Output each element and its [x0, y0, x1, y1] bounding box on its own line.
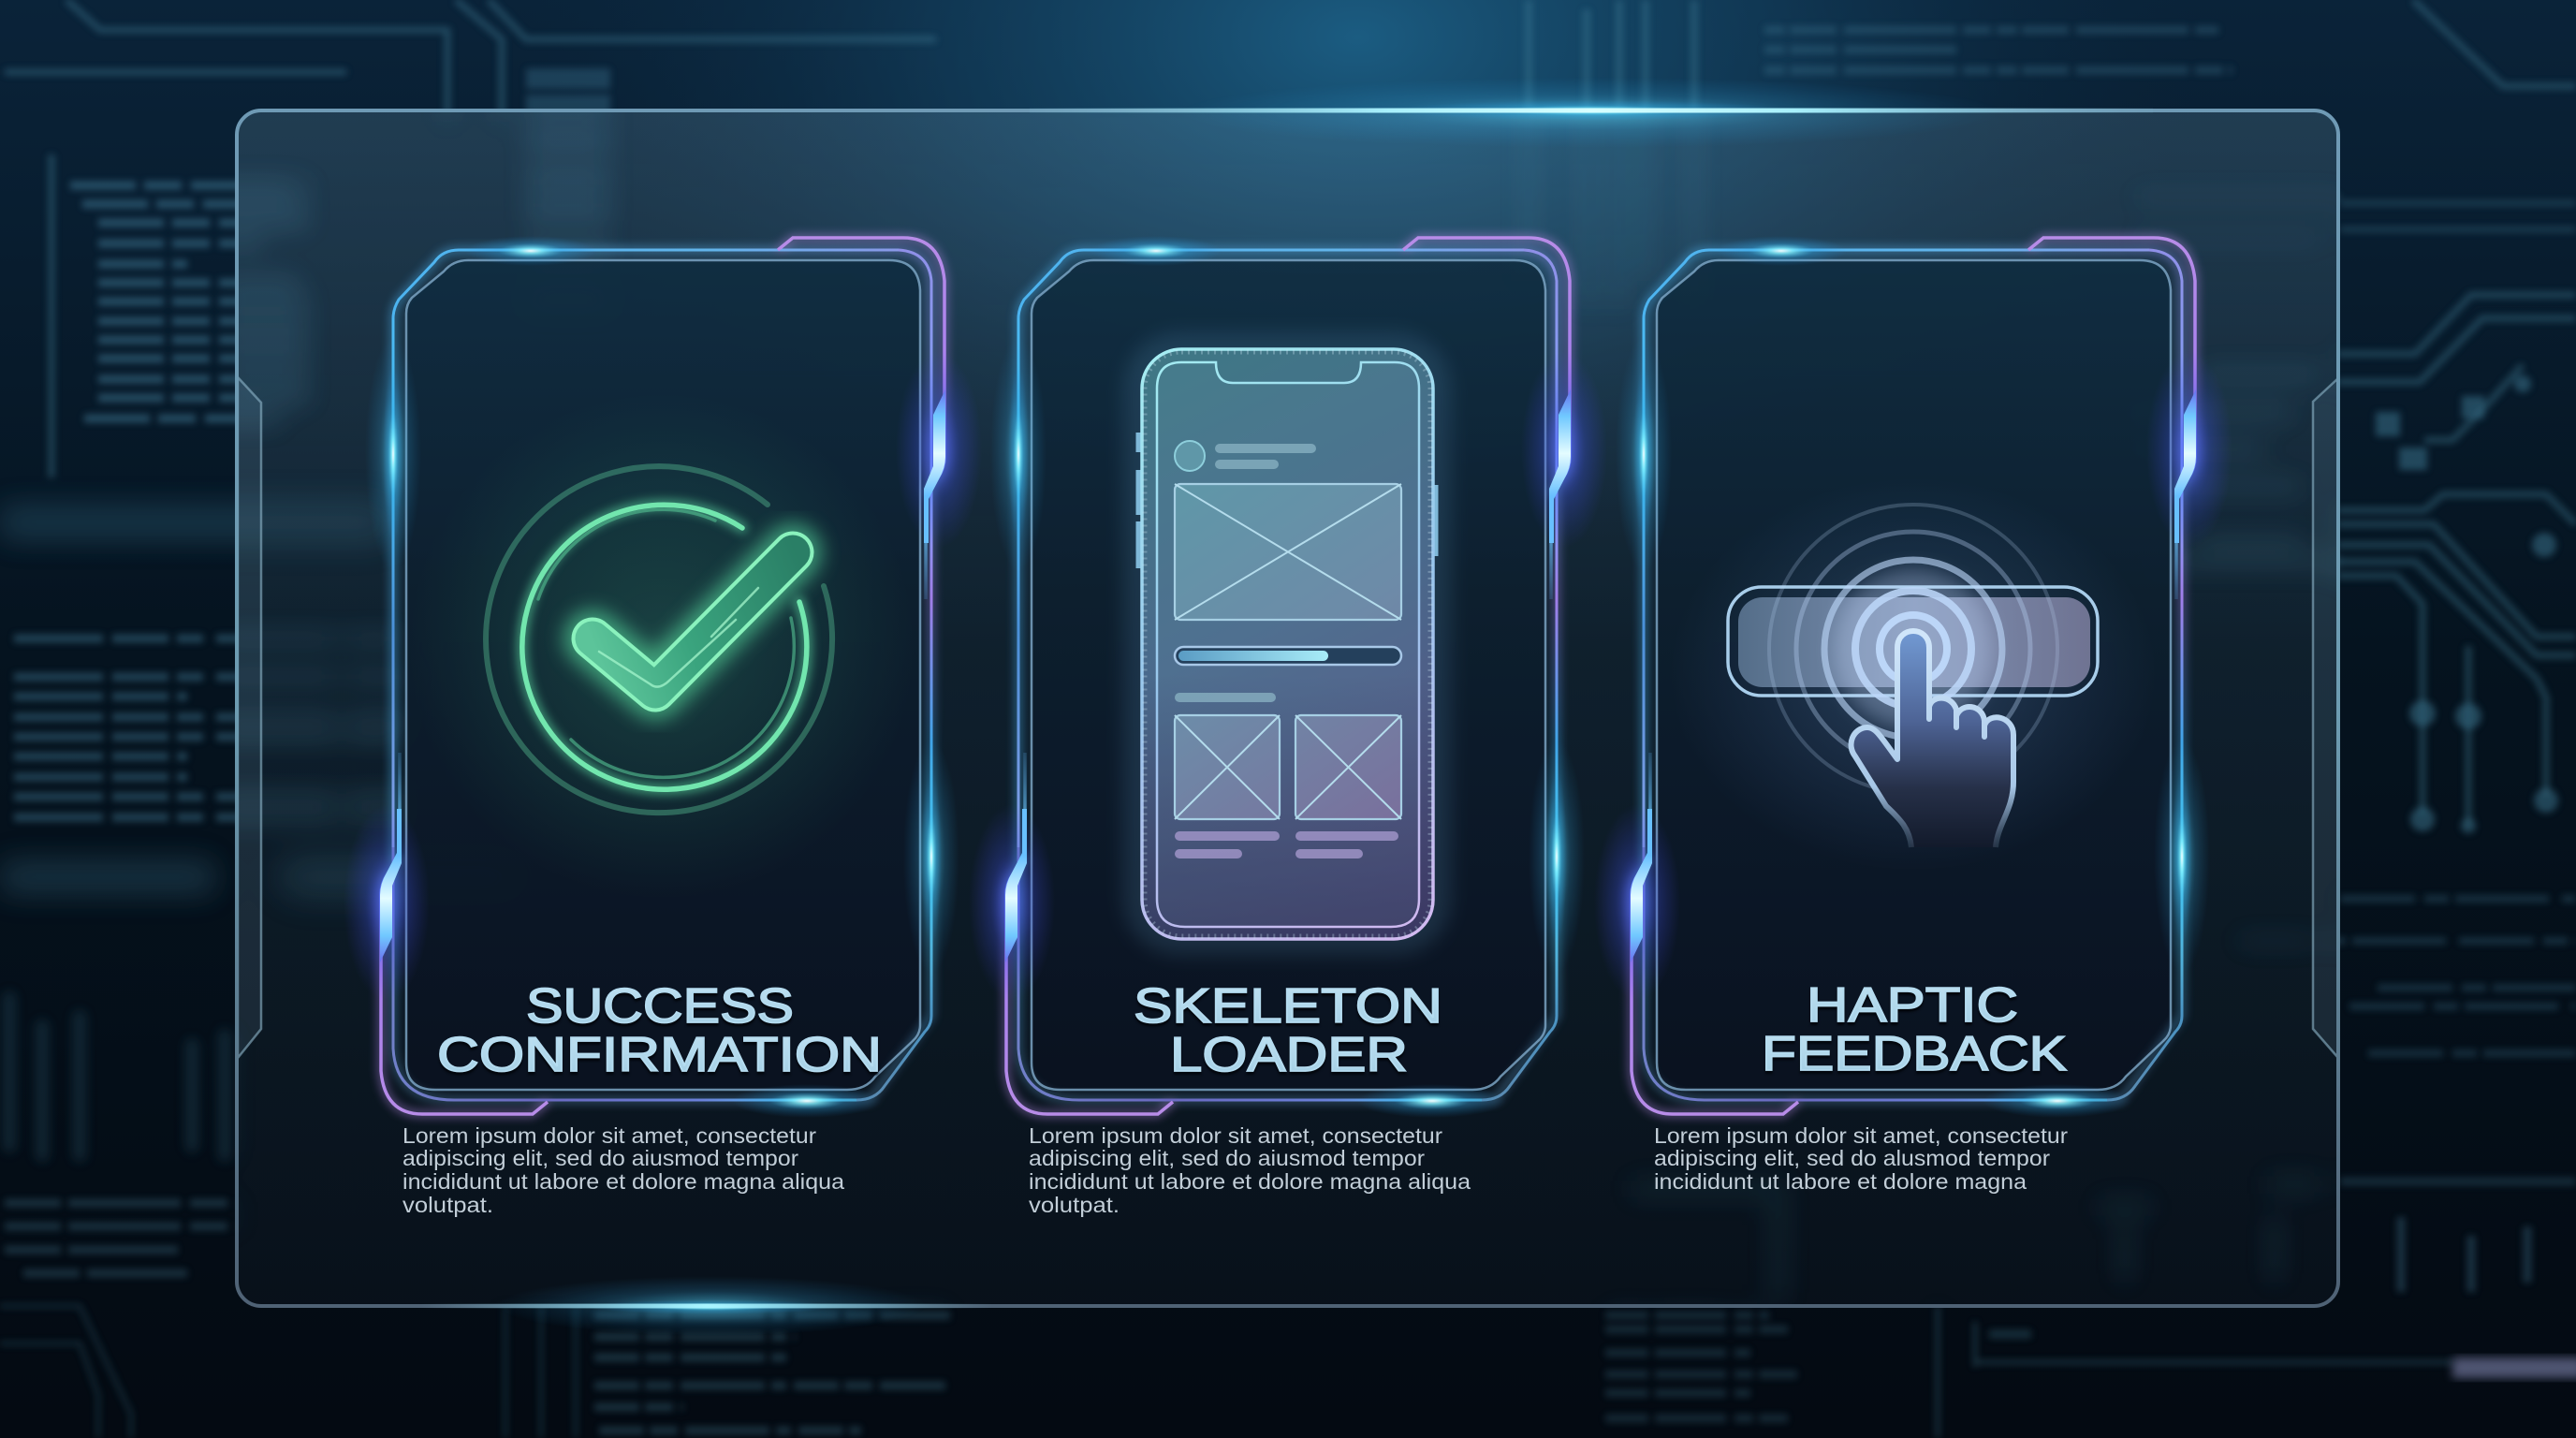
card frame [344, 236, 982, 1118]
text block: success description [402, 1123, 844, 1217]
heading: success confirmation: CONFIRMATION [437, 1028, 882, 1082]
text block: success description: volutpat. [402, 1193, 493, 1217]
icon: wireframe phone [1123, 332, 1451, 955]
text block: success description: incididunt ut labore et dolore magna aliqua [402, 1169, 844, 1194]
heading: success confirmation [437, 979, 882, 1082]
text block: skeleton description: Lorem ipsum dolor sit amet, consectetur [1029, 1123, 1442, 1148]
panel: haptic feedback [1594, 236, 2232, 1194]
heading: haptic feedback: FEEDBACK [1762, 1027, 2067, 1081]
heading: skeleton loader: SKELETON [1134, 979, 1442, 1034]
heading: haptic feedback: HAPTIC [1807, 978, 2018, 1033]
panel: glass frame [235, 82, 2340, 1333]
text block: skeleton description [1029, 1123, 1471, 1217]
icon: green check mark in rings [409, 393, 915, 899]
text block: haptic description: adipiscing elit, sed do alusmod tempor [1654, 1146, 2050, 1170]
text block: haptic description: Lorem ipsum dolor sit amet, consectetur [1654, 1123, 2068, 1148]
heading: success confirmation: SUCCESS [526, 979, 794, 1034]
text block: haptic description [1654, 1123, 2068, 1194]
text block: success description: Lorem ipsum dolor sit amet, consectetur [402, 1123, 816, 1148]
panel: skeleton loader [969, 236, 1607, 1217]
text block: skeleton description: volutpat. [1029, 1193, 1120, 1217]
text block: success description: adipiscing elit, sed do aiusmod tempor [402, 1146, 798, 1170]
card frame [1594, 236, 2232, 1118]
panel: success confirmation [344, 236, 982, 1217]
text block: haptic description: incididunt ut labore et dolore magna [1654, 1169, 2027, 1194]
text block: skeleton description: incididunt ut labore et dolore magna aliqua [1029, 1169, 1471, 1194]
heading: skeleton loader [1134, 979, 1442, 1082]
card frame [969, 236, 1607, 1118]
text block: skeleton description: adipiscing elit, sed do aiusmod tempor [1029, 1146, 1425, 1170]
icon: tapping hand on button [1670, 477, 2157, 871]
heading: skeleton loader: LOADER [1170, 1028, 1408, 1082]
heading: haptic feedback [1762, 978, 2067, 1081]
